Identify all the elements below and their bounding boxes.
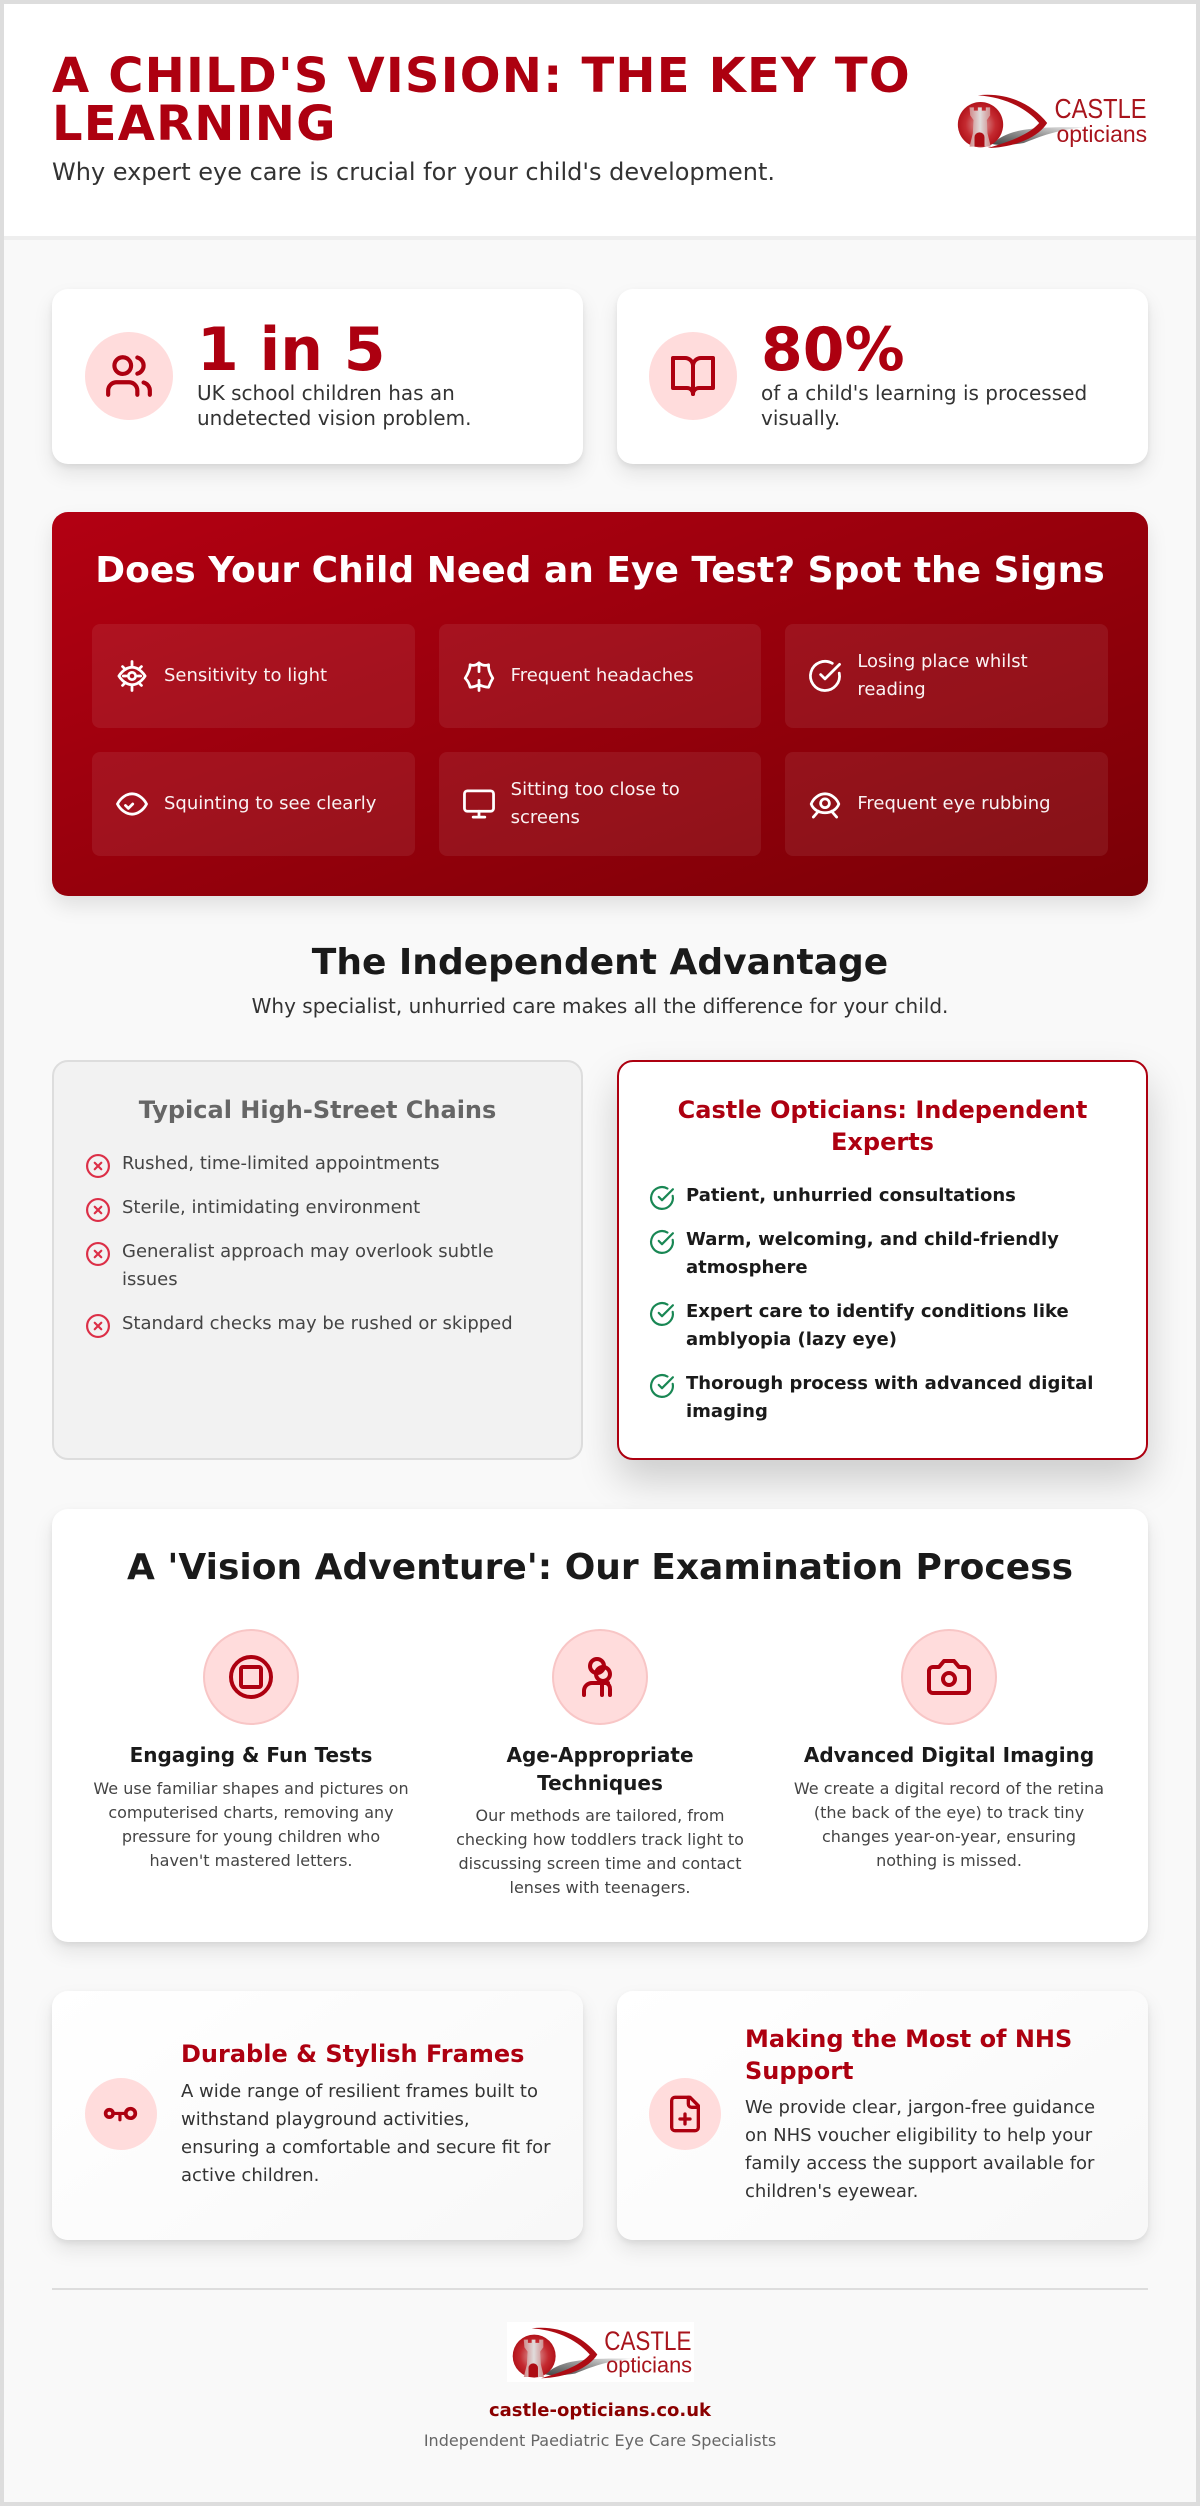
tile: sensitivity to light: Sensitivity to light: [164, 665, 327, 686]
card title: Support: [745, 2057, 854, 2085]
title: [52, 48, 911, 152]
item: Generalist approach may overlook subtle: [122, 1241, 494, 1262]
tile: sitting too close: [439, 752, 761, 856]
tile: squinting: Squinting to see clearly: [164, 793, 376, 814]
icon: file plus: [649, 2078, 721, 2150]
panel heading: [678, 1096, 1087, 1156]
card title: Making the Most of NHS: [745, 2025, 1072, 2053]
step text: [93, 1779, 409, 1870]
step text: [456, 1806, 744, 1897]
icon: camera: [901, 1629, 997, 1725]
tile: sensitivity to light: [92, 624, 415, 728]
step text: We create a digital record of the retina: [794, 1779, 1104, 1798]
tile: frequent headaches: Frequent headaches: [511, 665, 694, 686]
logo: Castle Opticians footer: opticians: [606, 2353, 692, 2378]
card title: Durable & Stylish Frames: [181, 2040, 524, 2068]
item: Rushed, time-limited appointments: [122, 1153, 440, 1174]
step text: nothing is missed.: [876, 1851, 1022, 1870]
panel: spot the signs: [52, 512, 1148, 896]
card text: active children.: [181, 2165, 319, 2186]
item: [86, 1241, 494, 1290]
tile: sitting too close: Sitting too close to: [511, 779, 680, 800]
step: age-appropriate: [456, 1629, 744, 1897]
panel heading: Castle Opticians: Independent: [678, 1096, 1087, 1124]
stat number: 1 in 5: [197, 315, 386, 385]
logo: Castle Opticians footer: [507, 2322, 694, 2382]
tile: losing place: [785, 624, 1108, 728]
tile: losing place: reading: [857, 679, 926, 700]
step text: pressure for young children who: [122, 1827, 380, 1846]
step title: [506, 1743, 694, 1795]
stat text: of a child's learning is processed: [761, 381, 1087, 405]
divider: [52, 2288, 1148, 2290]
step text: haven't mastered letters.: [150, 1851, 352, 1870]
step: engaging tests: [93, 1629, 409, 1870]
tile: sitting too close: screens: [511, 807, 580, 828]
stat card: 80%: [617, 289, 1148, 464]
header band: [0, 0, 1200, 240]
item: [650, 1373, 1093, 1422]
card title: [745, 2025, 1072, 2085]
title: LEARNING: [52, 96, 337, 152]
step title: Advanced Digital Imaging: [804, 1743, 1094, 1767]
item: Sterile, intimidating environment: [122, 1197, 420, 1218]
tile: eye rubbing: Frequent eye rubbing: [857, 793, 1051, 814]
item: Warm, welcoming, and child-friendly: [686, 1229, 1059, 1250]
icon: glasses: [85, 2078, 157, 2150]
icon: tablet in circle: [203, 1629, 299, 1725]
stat card: 1 in 5: [52, 289, 583, 464]
heading: the independent advantage: The Independent Advantage: [312, 942, 888, 983]
subtitle: Why expert eye care is crucial for your child's development.: [52, 158, 775, 186]
step text: computerised charts, removing any: [108, 1803, 394, 1822]
stat text: undetected vision problem.: [197, 406, 471, 430]
tagline: Independent Paediatric Eye Care Specialists: [424, 2431, 776, 2450]
item: Patient, unhurried consultations: [686, 1185, 1016, 1206]
check list: [650, 1185, 1093, 1422]
tile: losing place: Losing place whilst: [857, 651, 1028, 672]
step title: Age-Appropriate: [506, 1743, 694, 1767]
tile: frequent headaches: [439, 624, 761, 728]
panel heading: Typical High-Street Chains: [139, 1096, 496, 1124]
card text: withstand playground activities,: [181, 2109, 470, 2130]
stat text: UK school children has an: [197, 381, 455, 405]
card text: We provide clear, jargon-free guidance: [745, 2097, 1095, 2118]
step text: discussing screen time and contact: [459, 1854, 741, 1873]
card text: family access the support available for: [745, 2153, 1094, 2174]
card text: ensuring a comfortable and secure fit for: [181, 2137, 550, 2158]
item: issues: [122, 1269, 178, 1290]
step text: Our methods are tailored, from: [476, 1806, 724, 1825]
panel: vision adventure process: [52, 1509, 1148, 1942]
item: imaging: [686, 1401, 768, 1422]
title: A CHILD'S VISION: THE KEY TO: [52, 48, 911, 104]
item: atmosphere: [686, 1257, 808, 1278]
card: NHS support: [617, 1991, 1148, 2240]
logo: Castle Opticians header: opticians: [1056, 121, 1147, 147]
logo: Castle Opticians header: [958, 93, 1147, 148]
step text: lenses with teenagers.: [510, 1878, 690, 1897]
item: [650, 1301, 1069, 1350]
step: digital imaging: [794, 1629, 1104, 1870]
icon: parent and child: [552, 1629, 648, 1725]
website: castle-opticians.co.uk: [489, 2400, 711, 2421]
item: Thorough process with advanced digital: [686, 1373, 1093, 1394]
card text: on NHS voucher eligibility to help your: [745, 2125, 1092, 2146]
stat number: 80%: [761, 315, 905, 385]
card text: A wide range of resilient frames built to: [181, 2081, 538, 2102]
panel: typical high-street chains: [52, 1060, 583, 1460]
step text: [794, 1779, 1104, 1870]
panel heading: Experts: [831, 1128, 934, 1156]
stat text: [197, 381, 471, 430]
icon: open book: [649, 332, 737, 420]
tile: eye rubbing: [785, 752, 1108, 856]
item: [650, 1229, 1059, 1278]
card: durable frames: [52, 1991, 583, 2240]
item: amblyopia (lazy eye): [686, 1329, 897, 1350]
card text: children's eyewear.: [745, 2181, 918, 2202]
card text: [745, 2097, 1095, 2202]
step text: (the back of the eye) to track tiny: [814, 1803, 1084, 1822]
step text: checking how toddlers track light to: [456, 1830, 744, 1849]
step title: Techniques: [537, 1771, 663, 1795]
step text: We use familiar shapes and pictures on: [93, 1779, 409, 1798]
cross list: [86, 1153, 513, 1338]
stat text: [761, 381, 1087, 430]
card text: [181, 2081, 550, 2186]
subheading: Why specialist, unhurried care makes all the difference for your child.: [252, 994, 948, 1018]
panel: castle opticians: [617, 1060, 1148, 1460]
heading: Does Your Child Need an Eye Test? Spot the Signs: [95, 550, 1105, 591]
stat text: visually.: [761, 406, 840, 430]
step title: Engaging & Fun Tests: [130, 1743, 372, 1767]
icon: users: [85, 332, 173, 420]
item: Standard checks may be rushed or skipped: [122, 1313, 513, 1334]
tile: squinting: [92, 752, 415, 856]
heading: A 'Vision Adventure': Our Examination Process: [127, 1547, 1073, 1588]
footer: [424, 2326, 776, 2450]
step text: changes year-on-year, ensuring: [822, 1827, 1076, 1846]
item: Expert care to identify conditions like: [686, 1301, 1069, 1322]
